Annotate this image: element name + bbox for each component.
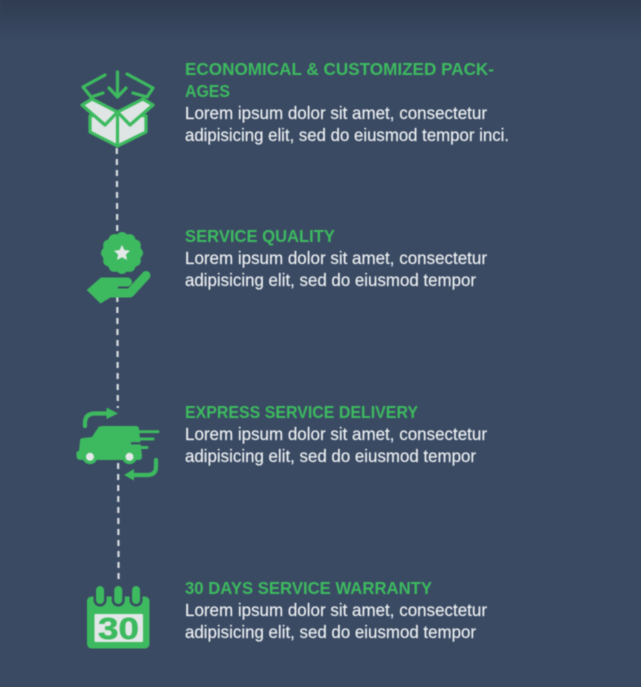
item: express delivery bbox=[76, 402, 487, 480]
item: economical packages bbox=[82, 59, 509, 146]
body text: Lorem ipsum dolor sit amet, consectetur bbox=[185, 424, 487, 444]
body text: Lorem ipsum dolor sit amet, consectetur bbox=[185, 248, 487, 268]
icon: hand holding star badge bbox=[87, 232, 146, 304]
bottom arrow bbox=[124, 460, 156, 480]
body text: adipisicing elit, sed do eiusmod tempor bbox=[185, 270, 476, 290]
heading: express delivery: EXPRESS SERVICE DELIVERY bbox=[185, 402, 418, 422]
body text: adipisicing elit, sed do eiusmod tempor inci. bbox=[185, 125, 509, 145]
open hand bbox=[87, 276, 146, 304]
top arrow bbox=[85, 408, 118, 426]
item: service quality bbox=[87, 226, 487, 304]
icon: speeding truck with arrows bbox=[76, 408, 158, 480]
truck body bbox=[76, 426, 158, 464]
body text: adipisicing elit, sed do eiusmod tempor bbox=[185, 622, 476, 642]
heading continuation: AGES bbox=[185, 81, 230, 101]
body text bbox=[185, 103, 509, 145]
body text bbox=[185, 248, 487, 290]
icon: open box with down arrow bbox=[82, 72, 153, 146]
body text: adipisicing elit, sed do eiusmod tempor bbox=[185, 446, 476, 466]
icon: calendar showing 30 bbox=[87, 585, 150, 648]
heading: warranty: 30 DAYS SERVICE WARRANTY bbox=[185, 578, 432, 598]
star badge bbox=[101, 232, 143, 274]
body text bbox=[185, 424, 487, 466]
heading: economical: ECONOMICAL & CUSTOMIZED PACK- bbox=[185, 59, 494, 79]
icon: calendar showing 30: 30 bbox=[98, 611, 139, 646]
timeline dashed connector bbox=[117, 148, 119, 586]
body text bbox=[185, 600, 487, 642]
item: service warranty bbox=[87, 578, 487, 648]
heading: service quality: SERVICE QUALITY bbox=[185, 226, 335, 246]
body text: Lorem ipsum dolor sit amet, consectetur bbox=[185, 600, 487, 620]
body text: Lorem ipsum dolor sit amet, consectetur bbox=[185, 103, 487, 123]
